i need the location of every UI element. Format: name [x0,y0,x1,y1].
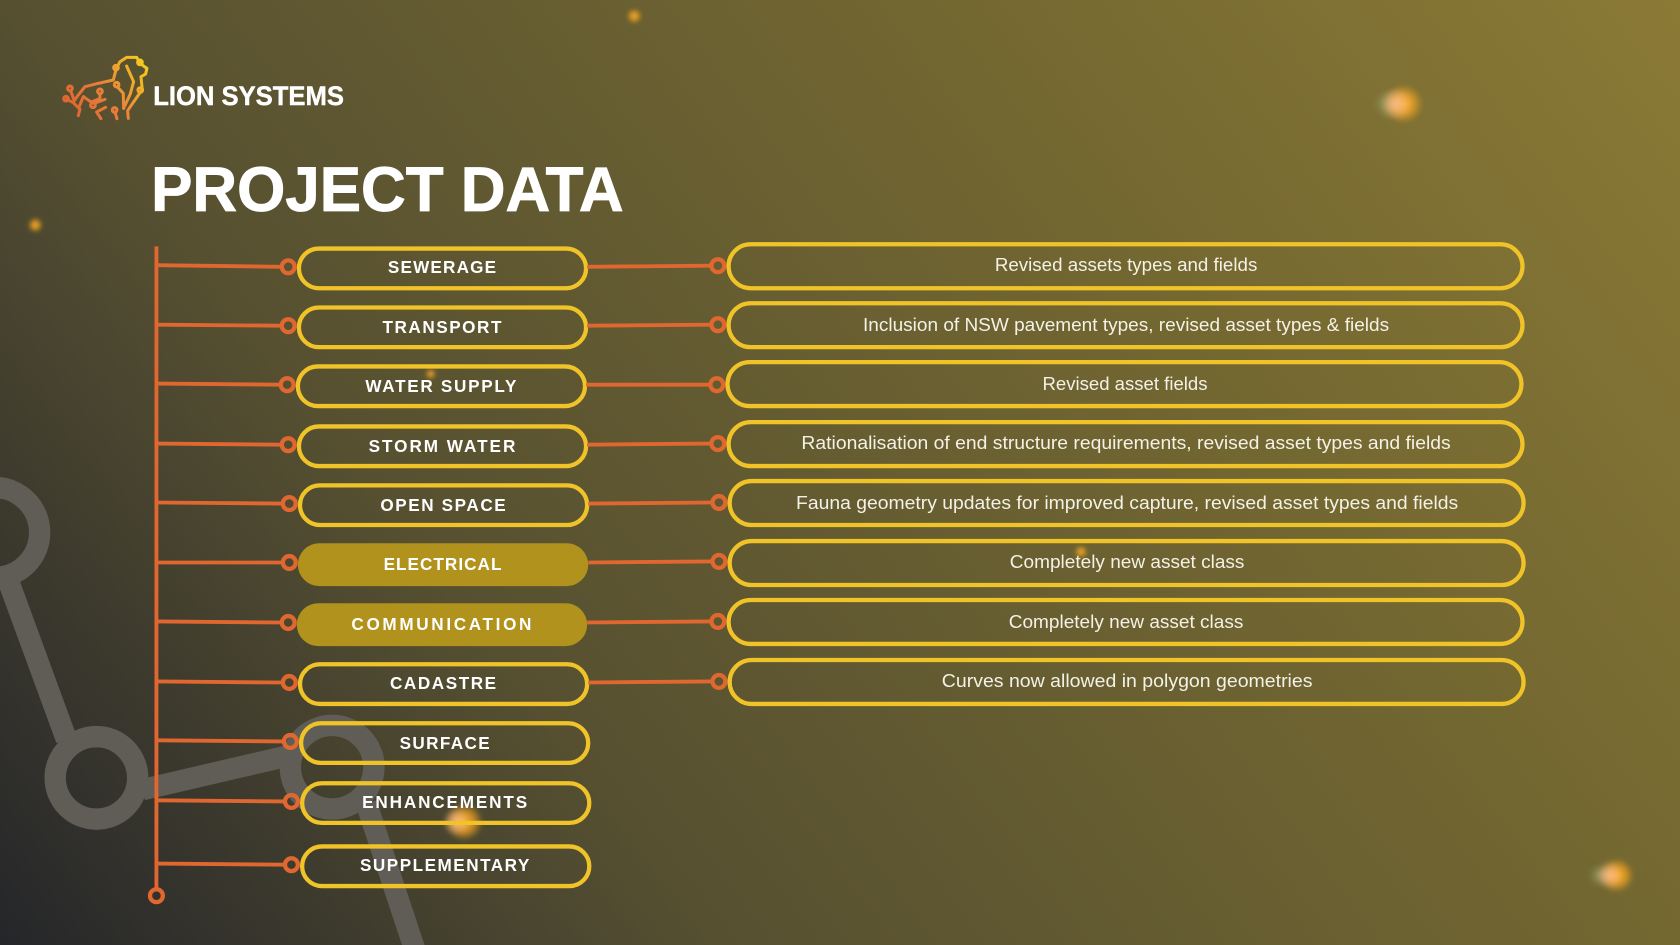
row: surface: SURFACE [400,733,490,753]
row: water supply: Revised asset fields [1042,373,1208,394]
logo wordmark: LION SYSTEMS [153,81,344,111]
row: electrical (highlighted) [156,541,1524,586]
decorative network graphic [0,488,423,945]
row: communication (highlighted) [156,600,1522,646]
connector trunk [150,246,163,902]
row: storm water: STORM WATER [369,436,516,456]
row: storm water: Rationalisation of end structure requirements, revised asset types and fields [801,432,1451,453]
row: cadastre [156,660,1524,704]
row: communication (highlighted): COMMUNICATION [351,614,531,634]
row: communication (highlighted): Completely new asset class [1009,611,1243,632]
row: transport [156,303,1522,347]
row: cadastre: CADASTRE [390,673,496,693]
row: storm water [156,422,1522,466]
logo: lion icon [64,57,147,119]
row: water supply [156,362,1521,406]
title: PROJECT DATA [151,155,624,225]
row: supplementary: SUPPLEMENTARY [360,855,530,875]
row: electrical (highlighted): ELECTRICAL [384,554,501,574]
row: sewerage: Revised assets types and fields [995,254,1257,275]
row: surface [156,723,588,763]
row: water supply: WATER SUPPLY [365,376,517,396]
row: cadastre: Curves now allowed in polygon geometries [942,670,1312,691]
row: open space: OPEN SPACE [380,495,506,515]
row: transport: Inclusion of NSW pavement types, revised asset types & fields [863,314,1389,335]
row: open space [156,481,1524,525]
row: open space: Fauna geometry updates for improved capture, revised asset types and fields [796,492,1458,513]
row: sewerage [156,244,1522,288]
row: sewerage: SEWERAGE [388,257,496,277]
row: supplementary [156,846,589,886]
row: transport: TRANSPORT [382,317,502,337]
row: enhancements: ENHANCEMENTS [362,792,527,812]
row: electrical (highlighted): Completely new asset class [1010,551,1244,572]
row: enhancements [156,783,589,823]
